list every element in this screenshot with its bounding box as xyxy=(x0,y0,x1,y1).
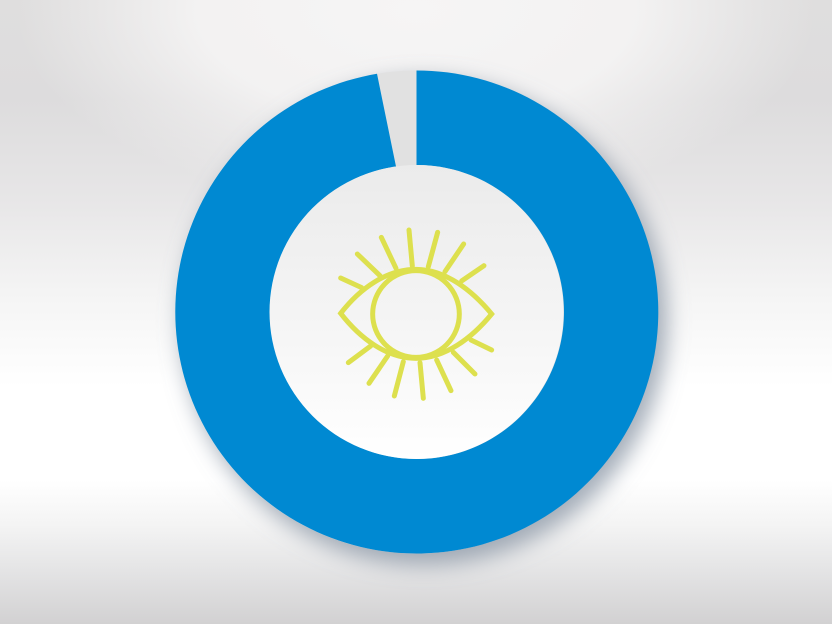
upper lashes xyxy=(341,230,484,288)
donut shadow xyxy=(181,79,667,565)
donut remainder: grey track xyxy=(175,70,658,554)
donut hole xyxy=(270,165,564,459)
iris xyxy=(373,271,459,357)
eye outline xyxy=(341,269,492,358)
lower lashes xyxy=(348,340,492,398)
donut chart xyxy=(175,70,658,554)
icon: eye with lashes xyxy=(341,230,492,398)
donut segment: blue xyxy=(175,70,658,553)
